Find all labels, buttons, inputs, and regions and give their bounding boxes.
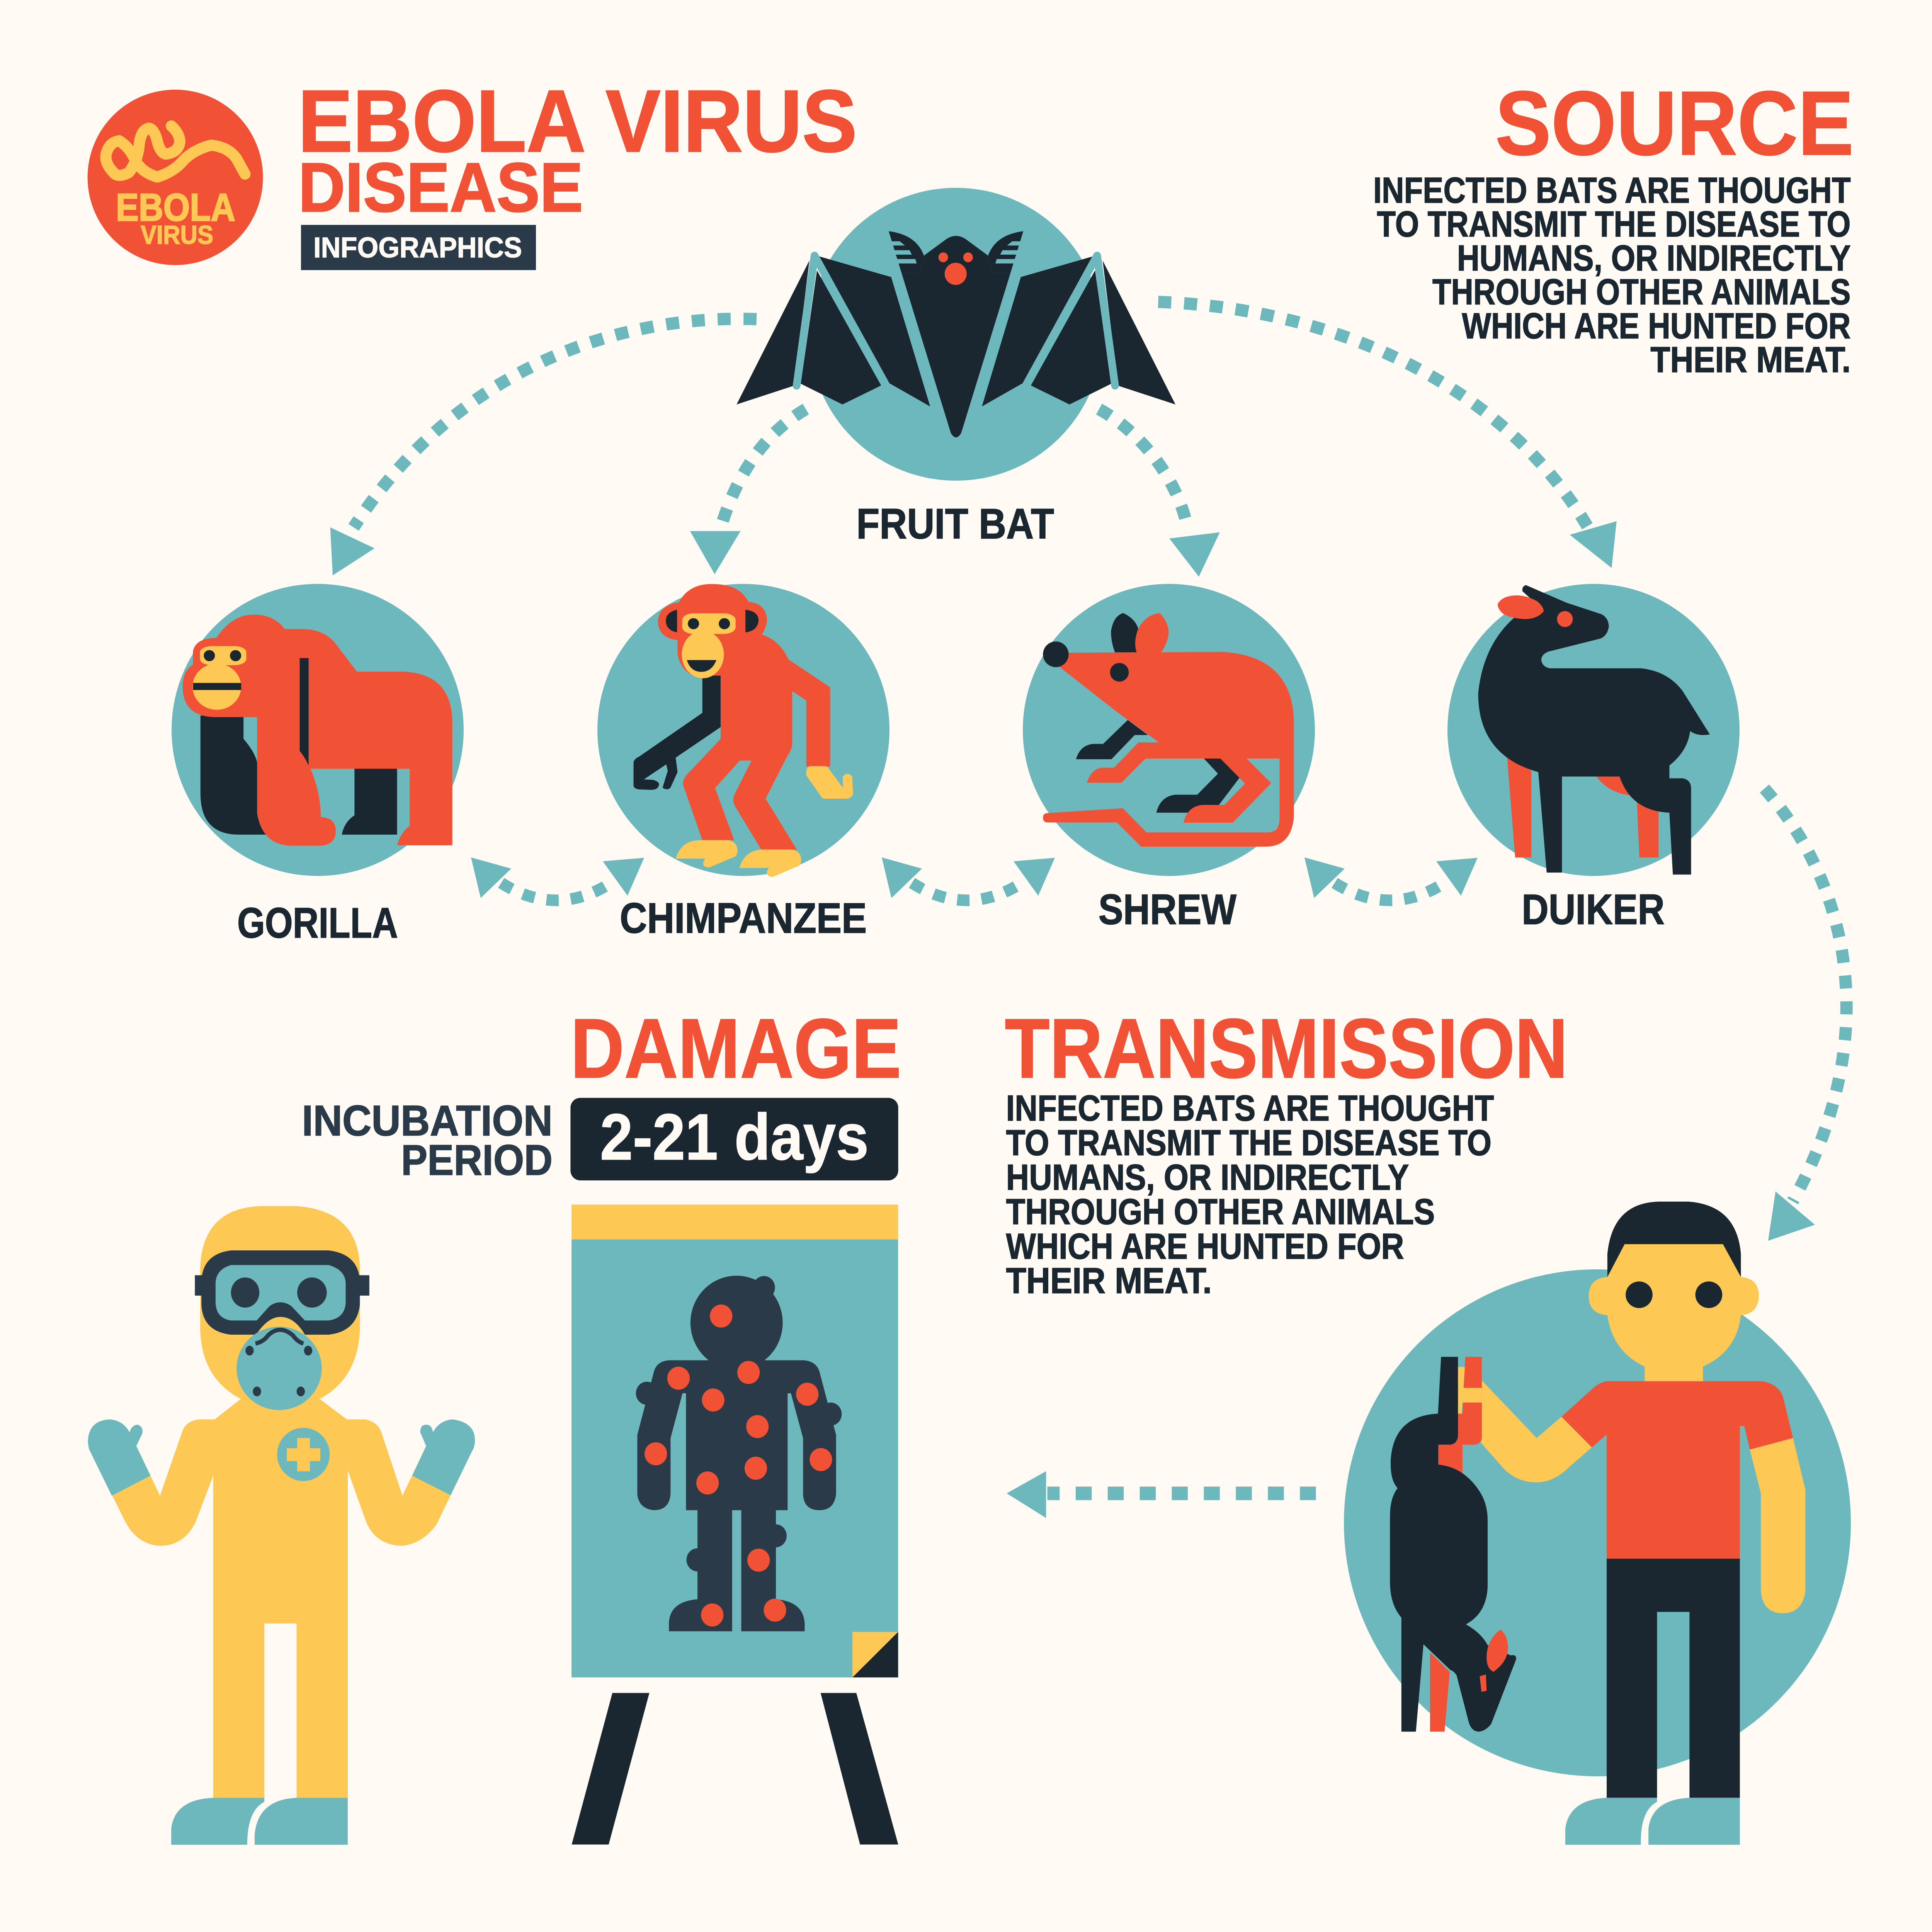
logo badge: VIRUS — [141, 220, 213, 250]
incubation period label: PERIOD — [401, 1136, 553, 1184]
panel: duiker — [1447, 584, 1740, 934]
transmission text block: INFECTED BATS ARE THOUGHT — [1006, 1088, 1494, 1128]
source text block: TO TRANSMIT THE DISEASE TO — [1377, 204, 1851, 244]
transmission text block: TO TRANSMIT THE DISEASE TO — [1006, 1122, 1492, 1163]
icon: chimpanzee — [633, 584, 853, 877]
transmission text block — [1006, 1088, 1494, 1301]
arrow: duiker to hunter — [1764, 789, 1847, 1241]
source text block: HUMANS, OR INDIRECTLY — [1457, 238, 1851, 278]
transmission text block: THROUGH OTHER ANIMALS — [1006, 1191, 1435, 1232]
source text block: THEIR MEAT. — [1650, 339, 1851, 380]
poster: damage to the body — [571, 1204, 898, 1845]
source text block: WHICH ARE HUNTED FOR — [1462, 305, 1851, 346]
icon: shrew — [1043, 613, 1294, 847]
source text block: THROUGH OTHER ANIMALS — [1432, 272, 1851, 312]
panel: gorilla — [172, 584, 464, 947]
transmission text block: WHICH ARE HUNTED FOR — [1006, 1226, 1404, 1266]
heading: source: SOURCE — [1495, 72, 1854, 174]
poster board with infected body — [571, 1204, 898, 1677]
heading: damage: DAMAGE — [570, 1002, 901, 1096]
heading: transmission: TRANSMISSION — [1005, 1002, 1568, 1096]
figure: worker in protective suit — [88, 1206, 475, 1845]
incubation period label — [302, 1096, 553, 1184]
transmission text block: THEIR MEAT. — [1006, 1260, 1212, 1301]
panel: fruit bat — [736, 188, 1175, 548]
transmission text block: HUMANS, OR INDIRECTLY — [1006, 1157, 1409, 1197]
icon: bat — [736, 231, 1175, 437]
arrows between chimpanzee and shrew — [882, 857, 1055, 900]
title: DISEASE — [298, 149, 583, 226]
panel: chimpanzee — [597, 584, 889, 942]
incubation period label: INCUBATION — [302, 1096, 553, 1145]
panel: shrew — [1023, 584, 1315, 934]
panel: hunter with animal — [1344, 1202, 1851, 1845]
easel legs — [572, 1693, 898, 1845]
label: duiker: DUIKER — [1522, 886, 1665, 934]
label: chimpanzee: CHIMPANZEE — [620, 895, 867, 942]
source text block — [1373, 170, 1851, 380]
label: shrew: SHREW — [1099, 886, 1236, 934]
logo badge — [88, 90, 263, 265]
infographics tag — [301, 225, 536, 270]
title: EBOLA VIRUS — [298, 72, 857, 170]
icon: hanging duiker — [1390, 1357, 1516, 1732]
arrows from bat to animals — [330, 302, 1617, 577]
source text block: INFECTED BATS ARE THOUGHT — [1373, 170, 1851, 211]
logo badge: EBOLA — [116, 186, 235, 229]
infographics tag: INFOGRAPHICS — [313, 231, 522, 264]
label: fruit bat: FRUIT BAT — [856, 500, 1054, 548]
label: gorilla: GORILLA — [237, 900, 398, 947]
arrows between shrew and duiker — [1304, 857, 1478, 900]
icon: duiker — [1478, 585, 1710, 874]
arrow: hunter to damage — [1007, 1471, 1316, 1518]
incubation days box: 2-21 days — [600, 1100, 869, 1173]
icon: gorilla — [183, 615, 452, 846]
arrows between gorilla and chimpanzee — [471, 857, 644, 900]
title — [298, 72, 857, 226]
figure: hunter — [1481, 1202, 1805, 1845]
